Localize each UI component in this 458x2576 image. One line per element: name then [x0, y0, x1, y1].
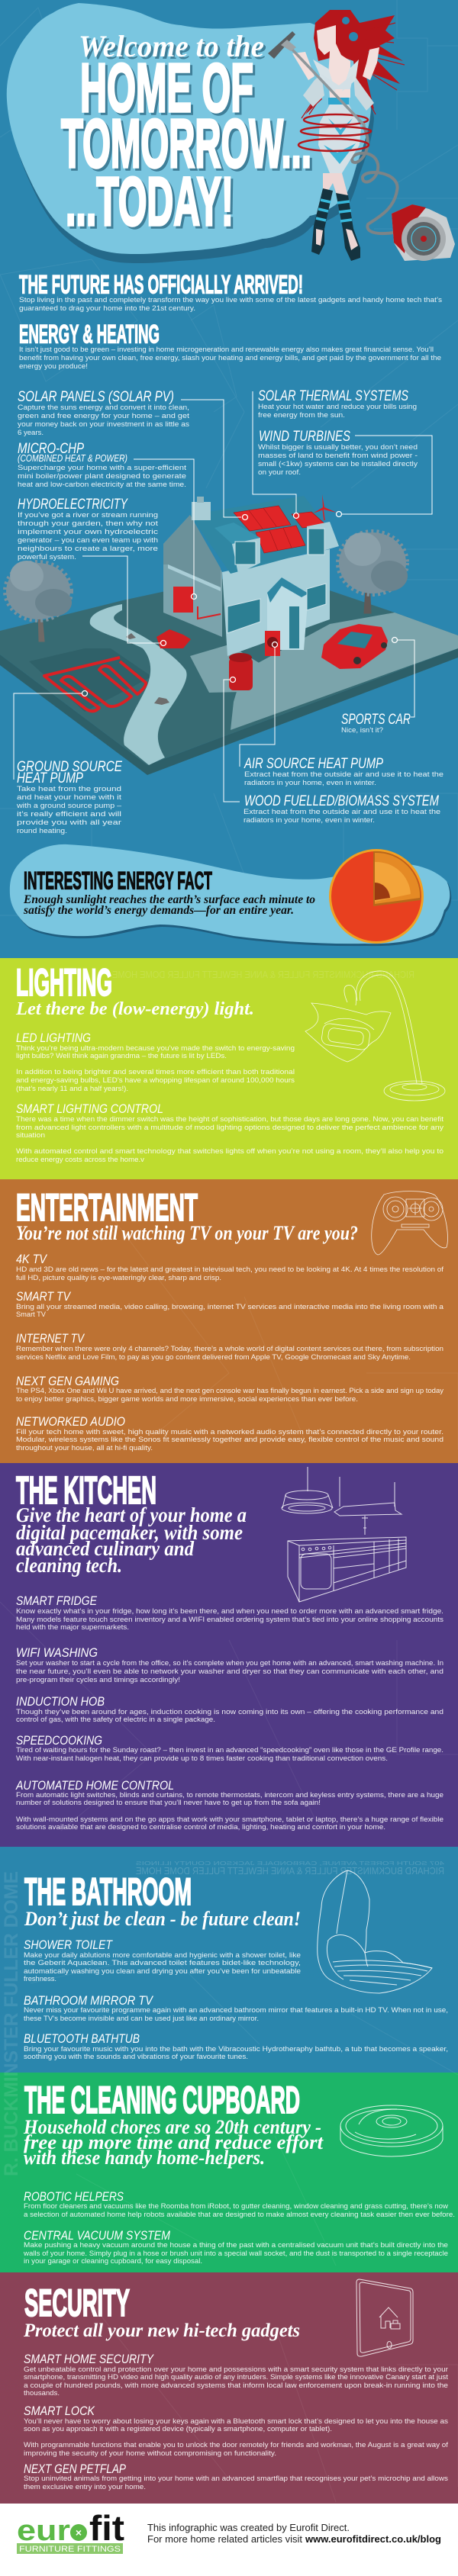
- automated home control: [15, 1778, 443, 1832]
- shower toilet: the Geberit Aquaclean. This advanced toilet features bidet-like technology,: [24, 1959, 301, 1967]
- wifi washing: Set your washer to start a cycle from the office, so it’s complete when you get home with an advanced, smart washing machine. In: [16, 1659, 443, 1667]
- smart lighting control: There was a time when the dimmer switch was the height of sophistication, but those days are long gone. Now, you can benefit: [16, 1115, 443, 1124]
- text: solar panels: 6 years.: [18, 429, 44, 437]
- hair curls: [342, 17, 358, 41]
- text: ground source heat pump: and heat your home with it: [17, 793, 121, 802]
- bathroom mirror tv: these TV’s become invisible and can be used just like an ordinary mirror.: [24, 2015, 259, 2023]
- wall boiler and pipe: [173, 587, 221, 619]
- text: micro-chp: heat and low-carbon electricity at the same time.: [18, 481, 186, 489]
- logo wordmark: eur: [17, 2515, 70, 2547]
- footer: credit text: For more home related articles visit: [147, 2533, 302, 2545]
- river: [90, 604, 187, 765]
- subtitle: with these handy home-helpers.: [24, 2147, 265, 2169]
- internet tv: INTERNET TV: [16, 1331, 85, 1346]
- icon: shower toilet outline: [318, 1870, 432, 1993]
- illustration: isometric eco house: [0, 494, 458, 775]
- connector lines and markers: [14, 391, 432, 802]
- smart home security: SMART HOME SECURITY: [24, 2352, 154, 2366]
- text: ground source heat pump: round heating.: [17, 827, 67, 835]
- text: air source heat pump: [244, 756, 443, 787]
- next gen petflap: [24, 2462, 448, 2491]
- smart lighting control: from advanced light controllers with a multitude of mood lighting options designed to deliver the perfect ambience for any: [16, 1124, 443, 1132]
- subtitle: Household chores are so 20th century -: [23, 2116, 321, 2138]
- smart tv: [16, 1289, 444, 1319]
- panel: entertainment: [16, 1186, 448, 1452]
- bluetooth bathtub: BLUETOOTH BATHTUB: [24, 2031, 140, 2046]
- text: hydroelectricity: through your garden, then why not: [18, 519, 158, 528]
- panel: faint blueprint lettering: RICHARD BUCKMINSTER FULLER & ANNE HEWLETT FULLER DOME HOME: [136, 1865, 444, 1877]
- fact text: satisfy the world’s energy demands—for an entire year.: [23, 904, 294, 917]
- text: micro-chp: mini boiler/power plant designed to generate: [18, 472, 186, 481]
- panel: hero title blob: [7, 3, 374, 263]
- text: wind turbines: on your roof.: [258, 468, 301, 477]
- text: hydroelectricity: powerful system.: [18, 553, 76, 561]
- text: solar panels: your money back on your investment in as little as: [18, 420, 189, 429]
- smart home security: a couple of hundred pounds, with more advanced systems that inform local law enforcement upon break-in running into the: [24, 2381, 448, 2390]
- text: micro-chp: [18, 441, 186, 489]
- text: micro-chp: Supercharge your home with a super-efficient: [18, 464, 186, 472]
- text: wood fuelled biomass system: [244, 793, 440, 825]
- text: sports car: SPORTS CAR: [341, 712, 411, 728]
- text: air source heat pump: AIR SOURCE HEAT PUMP: [244, 756, 383, 772]
- panel: the cleaning cupboard: [23, 2079, 455, 2266]
- intro text: Stop living in the past and completely transform the way you live with some of the latest gadgets and handy home tech that’s: [19, 296, 442, 304]
- panel: lighting: [15, 961, 445, 1164]
- next gen petflap: them exclusive entry into your home.: [24, 2483, 146, 2491]
- bluetooth bathtub: soothing you with the sounds and vibrations of your favourite tunes.: [24, 2053, 248, 2061]
- panel: faint blueprint lettering: 407 SOUTH FOREST AVENUE, CARBONDALE JACKSON COUNTY ILLINOIS: [135, 1861, 444, 1867]
- text: solar panels: SOLAR PANELS (SOLAR PV): [18, 389, 174, 405]
- smart fridge: SMART FRIDGE: [16, 1594, 98, 1608]
- led lighting: LED LIGHTING: [16, 1031, 91, 1045]
- text: wind turbines: [258, 429, 418, 477]
- 4k tv: full HD, picture quality is eye-wateringly clear, sharp and crisp.: [16, 1274, 221, 1282]
- smart fridge: Know exactly what’s in your fridge, how long it’s been there, and when you need to order more with an advanced smart fridge.: [16, 1607, 443, 1616]
- title: HOME OF: [80, 50, 253, 127]
- blob: [10, 844, 451, 946]
- networked audio: [16, 1414, 443, 1452]
- internet tv: services Netflix and Love Film, to pay as you go content delivered from Apple TV, Google Chromecast and Sky Anytime.: [16, 1353, 411, 1362]
- smart lighting control: situation: [16, 1131, 45, 1140]
- bluetooth bathtub: Bring your favourite music with you into the bath with the Vibracoustic Hydrotheraphy bathtub, a tub that becomes a speaker,: [24, 2045, 448, 2053]
- robotic helpers: [24, 2189, 455, 2219]
- speedcooking: [16, 1733, 443, 1763]
- fact text: Enough sunlight reaches the earth’s surface each minute to: [23, 893, 315, 906]
- text: hydroelectricity: implement your own hydroelectric: [18, 528, 158, 536]
- smart lock: improving the security of your home without compromising on functionality.: [24, 2449, 276, 2458]
- led lighting: (that’s nearly 11 and a half years!).: [16, 1085, 128, 1093]
- shower toilet: Make your daily ablutions more comfortable and hygienic with a shower toilet, like: [24, 1951, 301, 1960]
- bathroom mirror tv: BATHROOM MIRROR TV: [24, 1993, 153, 2008]
- wifi washing: the near future, you’ll even be able to network your washer and dryer so that they can communicate with each other, and: [16, 1667, 443, 1676]
- induction hob: control of gas, with the safety of electric in a single package.: [16, 1716, 215, 1724]
- networked audio: NETWORKED AUDIO: [16, 1414, 125, 1429]
- subtitle: free up more time and reduce effort: [24, 2131, 324, 2153]
- icon: kitchen units outline: [282, 1467, 406, 1602]
- heading: SECURITY: [24, 2282, 130, 2324]
- next gen petflap: Stop uninvited animals from getting into your home with an advanced smartflap that recognises your pet’s microchip and allows: [24, 2475, 448, 2483]
- logo wordmark: ×: [76, 2526, 82, 2539]
- text: hydroelectricity: [18, 497, 158, 561]
- wifi washing: WIFI WASHING: [16, 1645, 98, 1660]
- automated home control: number of solutions designed to ensure that you’ll never have to get up from the sofa again!: [16, 1799, 321, 1807]
- central vacuum system: in your garage or cleaning cupboard, for easy disposal.: [24, 2257, 202, 2266]
- energy intro text: benefit from having your own clean, free energy, slash your heating and energy bills, and get paid by the government for all the: [19, 354, 441, 362]
- next gen gaming: [16, 1374, 443, 1404]
- heading: THE KITCHEN: [16, 1468, 156, 1512]
- text: ground source heat pump: it’s really efficient and will: [17, 810, 121, 818]
- icon: security panel outline: [356, 2279, 413, 2356]
- biomass boiler: [229, 653, 253, 690]
- intro text: guaranteed to drag your home into the 21st century.: [19, 304, 195, 313]
- arms and hands: [292, 47, 379, 111]
- smart lock: soon as you approach it with a registered device (typically a smartphone, computer or tablet).: [24, 2425, 332, 2433]
- air source heat pump: [265, 631, 280, 656]
- shower toilet: [24, 1938, 301, 1983]
- logo strapline bar: FURNITURE FITTINGS: [19, 2545, 121, 2554]
- subtitle: [16, 1503, 247, 1577]
- smart home security: thousands.: [24, 2389, 60, 2398]
- networked audio: throughout your house, all at hi-fi quality.: [16, 1444, 153, 1452]
- panel: faint blueprint lettering: R. BUCKMINSTER FULLER DOME: [1, 1871, 22, 2176]
- text: air source heat pump: Extract heat from the outside air and use it to heat the: [244, 770, 443, 779]
- robotic helpers: ROBOTIC HELPERS: [24, 2189, 124, 2204]
- shower toilet: SHOWER TOILET: [24, 1938, 113, 1952]
- text: sports car: [341, 712, 411, 735]
- bluetooth bathtub: [24, 2031, 448, 2061]
- text: wind turbines: Whilst bigger is usually better, you don’t need: [258, 443, 418, 452]
- text: solar panels: green and free energy for your home – and get: [18, 412, 189, 420]
- solar panels: [234, 506, 326, 553]
- panel: faint blueprint lettering: [1, 969, 444, 2176]
- automated home control: AUTOMATED HOME CONTROL: [15, 1778, 174, 1793]
- subtitle: Don’t just be clean - be future clean!: [24, 1908, 301, 1930]
- smart lock: SMART LOCK: [24, 2404, 95, 2418]
- next gen gaming: to enjoy better graphics, bigger game worlds and more immersive, social experiences than ever before.: [16, 1395, 358, 1404]
- text: wood fuelled biomass system: radiators in your home, even in winter.: [244, 816, 375, 825]
- smart lighting control: reduce energy costs across the home.v: [16, 1156, 144, 1164]
- central vacuum system: walls of your home. Simply plug in a hose or brush unit into a special wall socket, and the dust is transported to a single receptacle: [23, 2250, 448, 2258]
- smart lock: You’ll never have to worry about losing your keys again with a Bluetooth smart lock that’s designed to let you into the house as: [24, 2417, 448, 2426]
- wind turbine: [313, 494, 337, 520]
- smart tv: SMART TV: [16, 1289, 71, 1304]
- subtitle: Protect all your new hi-tech gadgets: [23, 2320, 300, 2341]
- ground slab: [0, 577, 458, 775]
- rocks: [126, 633, 169, 705]
- central vacuum system: CENTRAL VACUUM SYSTEM: [24, 2228, 171, 2243]
- heading: ENTERTAINMENT: [16, 1186, 198, 1229]
- 4k tv: [16, 1252, 443, 1282]
- ground source pipes: [44, 658, 146, 711]
- text: solar thermal systems: [258, 388, 417, 420]
- smart tv: Bring all your streamed media, video calling, browsing, internet TV services and interactive media into the living room with a: [16, 1303, 444, 1311]
- spinning rings: [298, 114, 371, 151]
- callout: interesting energy fact: [10, 844, 451, 946]
- 4k tv: HD and 3D are old news – for the latest and greatest in televisual tech, you need to be looking at 4K. At 4 times the resolution of: [16, 1265, 443, 1274]
- text: solar thermal systems: SOLAR THERMAL SYSTEMS: [258, 388, 408, 404]
- wifi washing: [16, 1645, 443, 1684]
- hydro generator: [156, 629, 191, 648]
- porch: [267, 577, 308, 650]
- internet tv: Remember when there were only 4 channels? Today, there’s a whole world of digital content services out there, from subscription: [16, 1345, 443, 1353]
- icon: robot vacuum outline: [340, 2105, 443, 2156]
- smart lighting control: [16, 1101, 443, 1164]
- legs and striped socks: [311, 173, 360, 261]
- text: wind turbines: masses of land to benefit from wind power -: [258, 452, 418, 460]
- title: ...TODAY!: [66, 164, 234, 240]
- heading: energy and heating: ENERGY & HEATING: [19, 320, 160, 349]
- text: ground source heat pump: with a ground source pump –: [16, 802, 122, 810]
- footer: credit text: This infographic was created by Eurofit Direct.: [147, 2522, 350, 2533]
- face and chest: [317, 25, 350, 98]
- smart lock: With programmable functions that enable you to unlock the door remotely for friends and workman, the August is a great way of: [24, 2441, 448, 2449]
- automated home control: From automatic light switches, blinds and curtains, to remote thermostats, intercom and keyless entry systems, there are a huge: [16, 1791, 443, 1799]
- smart lighting control: SMART LIGHTING CONTROL: [16, 1101, 163, 1116]
- text: ground source heat pump: Take heat from the ground: [17, 785, 121, 793]
- smart fridge: [16, 1594, 443, 1632]
- smart fridge: held with the major supermarkets.: [16, 1623, 129, 1632]
- ground floor windows: [227, 584, 326, 633]
- speedcooking: SPEEDCOOKING: [16, 1733, 102, 1748]
- next gen gaming: NEXT GEN GAMING: [16, 1374, 119, 1388]
- subtitle: digital pacemaker, with some: [16, 1521, 243, 1544]
- heading: LIGHTING: [16, 961, 112, 1004]
- hair: [302, 10, 405, 118]
- led lighting: light bulbs? Well think again grandma – the future is lit by LEDs.: [16, 1052, 227, 1060]
- fact text: [23, 893, 315, 917]
- next gen petflap: NEXT GEN PETFLAP: [24, 2462, 127, 2476]
- speedcooking: With near-instant halogen heat, they can provide up to 8 times faster cooking than traditional convection ovens.: [16, 1754, 388, 1763]
- induction hob: [16, 1694, 443, 1724]
- subtitle: cleaning tech.: [16, 1554, 122, 1577]
- robotic helpers: a selection of automated home help robots available that are designed to make almost every cleaning task easier then ever before.: [24, 2211, 455, 2219]
- smart lighting control: With automated control and smart technology that switches lights off when you’re not using a room, they’ll also help you to: [16, 1147, 443, 1156]
- icon: earth cross-section: [329, 849, 424, 944]
- led lighting: and energy-saving bulbs, LED’s have a whopping lifespan of around 100,000 hours: [16, 1076, 295, 1085]
- chimney: [192, 497, 211, 520]
- text: ground source heat pump: GROUND SOURCE: [17, 759, 122, 775]
- front wall: [222, 549, 330, 656]
- speedcooking: Tired of waiting hours for the Sunday roast? – then invest in an advanced “speedcooking” oven like those in the GE Profile range.: [16, 1746, 443, 1754]
- roof: [190, 496, 340, 574]
- text: ground source heat pump: HEAT PUMP: [17, 770, 83, 786]
- central vacuum system: [23, 2228, 448, 2266]
- led lighting: Think you’re being ultra-modern because you’ve made the switch to energy-saving: [16, 1044, 295, 1053]
- text: ground source heat pump: provide you with all year: [17, 818, 122, 827]
- panel: the kitchen: [15, 1467, 443, 1832]
- bathroom mirror tv: [24, 1993, 448, 2023]
- text: solar panels: [18, 389, 189, 437]
- led lighting: [16, 1031, 295, 1093]
- text: ground source heat pump: [16, 759, 122, 835]
- tree left: [6, 561, 72, 641]
- illustration: woman with vacuum cleaner: [268, 10, 455, 261]
- robotic helpers: From floor cleaners and vacuums like the Roomba from iRobot, to gutter cleaning, window cleaning and grass cutting, there’s now: [24, 2202, 448, 2211]
- vacuum tube and head: [268, 31, 365, 126]
- smart tv: Smart TV: [16, 1311, 47, 1319]
- text: micro-chp: MICRO-CHP: [18, 441, 84, 457]
- text: micro-chp: (COMBINED HEAT & POWER): [18, 452, 127, 464]
- panel: security: [23, 2279, 449, 2491]
- text: sports car: Nice, isn’t it?: [341, 726, 383, 735]
- dormers and upper windows: [214, 522, 339, 574]
- footer: credit text: www.eurofitdirect.co.uk/blog: [305, 2533, 441, 2545]
- 4k tv: 4K TV: [16, 1252, 47, 1266]
- text: solar thermal systems: free energy from the sun.: [258, 411, 345, 420]
- footer: eurofit logo: [17, 2508, 124, 2554]
- text: wind turbines: small (<1kw) systems can be installed directly: [258, 460, 418, 468]
- intro text: [19, 296, 442, 313]
- smart home security: Get unbeatable control and protection over your home and possessions with a smart security system that links directly to your: [24, 2365, 449, 2374]
- subtitle: Let there be (low-energy) light.: [15, 999, 254, 1019]
- sports car: [321, 624, 388, 669]
- title: Welcome to the: [79, 29, 264, 63]
- energy intro text: [19, 346, 441, 371]
- title: [61, 29, 311, 240]
- automated home control: With wall-mounted systems and on the go apps that work with your smartphone, tablet or laptop, there’s a huge range of flexible: [16, 1815, 443, 1824]
- panel: faint blueprint lettering: RICHARD BUCKMINSTER FULLER & ANNE HEWLETT FULLER DOME HOME: [112, 969, 414, 980]
- heading: THE BATHROOM: [24, 1870, 192, 1913]
- text: hydroelectricity: If you’ve got a river or stream running: [18, 511, 158, 519]
- icon: designer lamp outline: [305, 971, 445, 1101]
- text: air source heat pump: radiators in your home, even in winter.: [244, 779, 376, 787]
- smart lock: [24, 2404, 448, 2458]
- subtitle: Give the heart of your home a: [16, 1503, 247, 1526]
- shower toilet: automatically washing you clean and drying you after you’ve been for unbeatable: [24, 1967, 301, 1976]
- next gen gaming: The PS4, Xbox One and Wii U have arrived, and the next gen console war has finally begun in earnest. Pick a side and sign up today: [16, 1387, 443, 1395]
- cutaway side wall: [163, 515, 222, 637]
- led lighting: In addition to being brighter and several times more efficient than both traditional: [16, 1068, 295, 1076]
- logo wordmark: fit: [89, 2508, 124, 2548]
- text: solar thermal systems: Heat your hot water and reduce your bills using: [258, 403, 417, 411]
- text: hydroelectricity: generator – you can even team up with: [18, 536, 158, 545]
- silver suit: [313, 59, 361, 173]
- text: wind turbines: WIND TURBINES: [259, 429, 350, 445]
- wifi washing: pre-program their cycles and timings accordingly!: [16, 1676, 180, 1684]
- energy intro text: energy you produce!: [19, 362, 88, 371]
- text: hydroelectricity: neighbours to create a larger, more: [18, 545, 158, 553]
- text: hydroelectricity: HYDROELECTRICITY: [18, 497, 128, 513]
- heading: INTERESTING ENERGY FACT: [24, 867, 212, 894]
- central vacuum system: Make pushing a heavy vacuum around the house a thing of the past with a centralised vacuum unit that’s built directly into the: [24, 2241, 448, 2250]
- shower toilet: freshness.: [24, 1975, 56, 1983]
- networked audio: Modular, wireless systems like the Sonos fit seamlessly together and provide easy, flexible control of the music and sound: [16, 1436, 443, 1444]
- smart home security: smartphone, transmitting HD video and high quality audio of any intruders. Simple systems like the innovative Canary start at just: [24, 2373, 448, 2381]
- footer: credit text: [147, 2522, 441, 2545]
- tree right: [339, 532, 408, 613]
- hose and vacuum cleaner: [352, 126, 455, 261]
- bathroom mirror tv: Never miss your favourite programme again with an advanced bathroom mirror that features a built-in HD TV. When not in use,: [24, 2006, 448, 2015]
- automated home control: solutions available that are designed to centralise control of media, lighting, heating and comfort in your home.: [16, 1823, 385, 1832]
- subtitle: advanced culinary and: [16, 1537, 194, 1560]
- energy intro text: It isn’t just good to be green – investing in home microgeneration and renewable energy also makes great financial sense. You’ll: [19, 346, 434, 354]
- induction hob: Though they’ve been around for ages, induction cooking is now coming into its own – offering the cooking performance and: [16, 1708, 443, 1716]
- text: wood fuelled biomass system: Extract heat from the outside air and use it to heat the: [244, 808, 440, 816]
- smart home security: [24, 2352, 449, 2398]
- internet tv: [16, 1331, 443, 1362]
- smart fridge: Many models feature touch screen inventory and a WIFI enabled ordering system that’s tied into your online shopping accounts: [16, 1616, 443, 1624]
- induction hob: INDUCTION HOB: [16, 1694, 105, 1709]
- subtitle: [23, 2116, 324, 2169]
- panel: the bathroom: [24, 1870, 448, 2061]
- networked audio: Fill your tech home with sweet, high quality music with a networked audio system that’s connected directly to your router.: [16, 1428, 443, 1436]
- text: solar panels: Capture the suns energy and convert it into clean,: [18, 404, 189, 412]
- icon: game controller outline: [372, 1192, 448, 1255]
- logo wordmark: [17, 2508, 124, 2548]
- subtitle: You’re not still watching TV on your TV are you?: [16, 1222, 358, 1244]
